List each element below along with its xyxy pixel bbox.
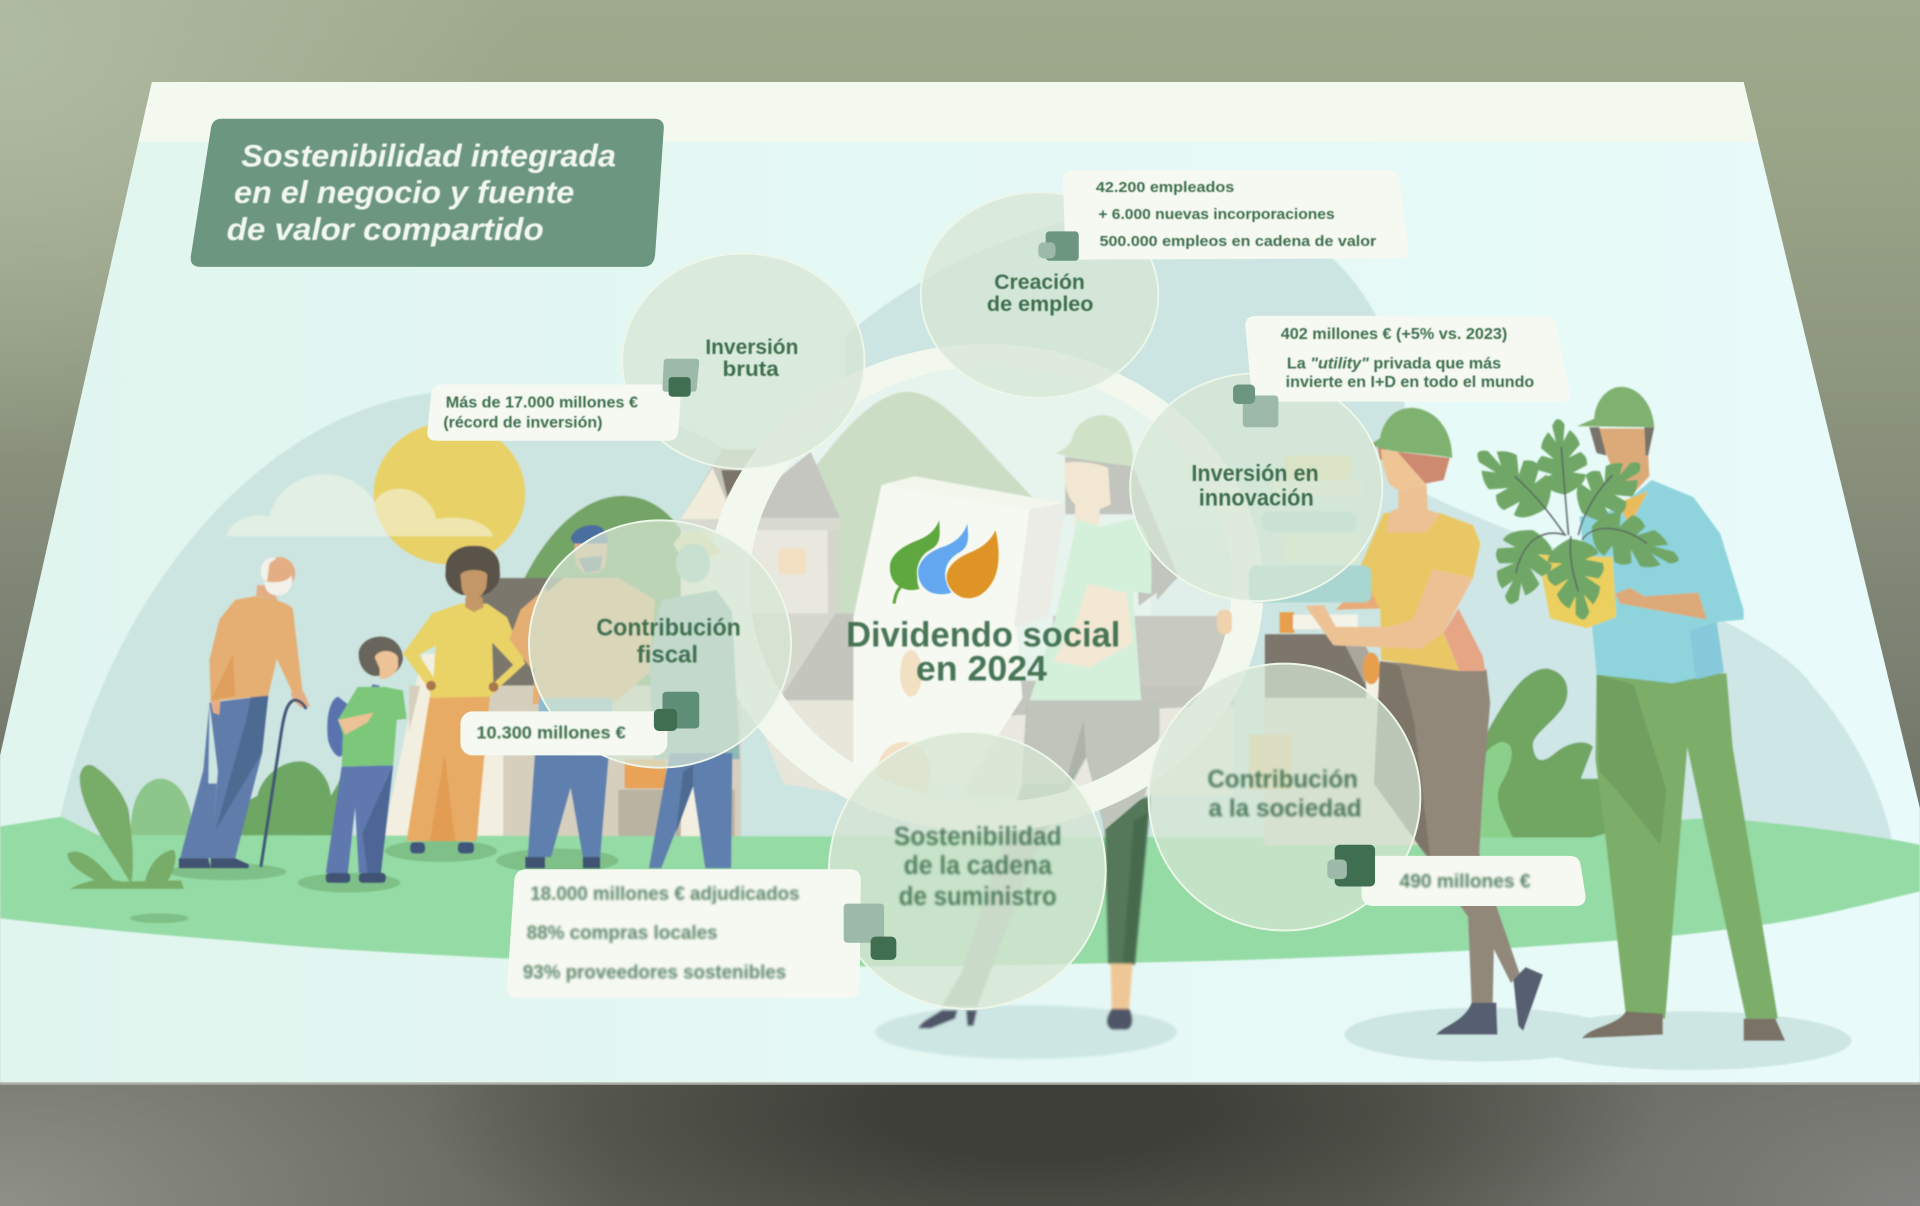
hill: right dome [1408,485,1895,857]
title text: de valor compartido [227,211,544,247]
right-side house details behind woman [1249,634,1426,845]
panel: Contribución a la sociedad [1149,664,1586,931]
text: cadena figures [523,884,800,983]
central ring area: inner mountain, houses and overlay [746,364,1235,806]
green hill [524,495,682,686]
text: empleo figures: 500.000 empleos en cadena de valor [1100,234,1377,250]
callout: empleo figures [1063,170,1408,260]
title text [227,138,616,247]
callout: sociedad figures [1362,856,1586,906]
person: man in blue shirt [1528,387,1851,1070]
heading: Inversión en innovación: innovación [1199,485,1314,511]
text: cadena figures: 93% proveedores sostenibles [523,962,786,983]
heading: Creación de empleo [987,271,1093,316]
heading: Inversión en innovación [1191,460,1319,511]
books inside bubble [1249,455,1371,602]
person: woman with yellow top [1217,408,1619,1062]
icon: squares [654,692,699,731]
white block with peach shapes [853,616,1022,806]
potted plant [1476,418,1680,629]
text: innovación figures: invierte en I+D en todo el mundo [1286,374,1535,391]
person: man with blue hair [509,525,655,868]
heading: Contribución fiscal: fiscal [637,641,698,668]
white ring [708,344,1264,831]
inner houses [753,514,1234,796]
heading: Inversión bruta: Inversión [705,335,798,359]
title text: en el negocio y fuente [234,174,574,210]
heading: Inversión bruta: bruta [722,357,780,381]
central heading: en 2024 [916,649,1047,689]
callout: cadena figures [507,869,861,998]
panel: Sostenibilidad de la cadena de suministro [507,732,1106,1009]
heading: Sostenibilidad [894,823,1062,911]
heading: Inversión bruta [705,335,798,381]
text: empleo figures: 42.200 empleados [1096,180,1234,196]
text: cadena figures: 18.000 millones € adjudicados [530,884,800,905]
title text: Sostenibilidad integrada [241,138,616,174]
bubble: Contribución fiscal [529,520,791,768]
heading: Contribución a la sociedad [1207,765,1362,823]
heading: Contribución a la sociedad: Contribución [1207,765,1358,793]
central heading: Dividendo social [846,614,1120,654]
callout: innovación figures [1245,316,1570,402]
heading: Sostenibilidad: Sostenibilidad [894,823,1062,851]
text: fiscal figures: 10.300 millones € [476,722,626,742]
person: elderly man [179,557,310,868]
heading: Creación de empleo: de empleo [987,293,1093,316]
heading: Contribución fiscal: Contribución [596,614,741,641]
foreground plant [67,765,184,889]
sun [374,422,525,564]
bubble: Sostenibilidad [829,732,1106,1009]
text: innovación figures: La "utility" privada que más [1287,356,1501,373]
panel: Contribución fiscal [460,520,791,768]
heading: Contribución a la sociedad: a la sociedad [1209,795,1362,823]
person: centre woman, pale inside ring [1022,415,1178,830]
illustration background scene [0,203,1920,966]
icon: squares [1233,384,1278,427]
ground patches [130,840,618,923]
text: inversion figures [443,395,638,431]
icon: squares [844,904,896,960]
text: innovación figures [1281,326,1535,391]
title panel [191,119,664,267]
person: second man [649,531,740,868]
callout: fiscal figures [460,711,667,755]
panel: Inversión bruta [427,253,864,469]
bubble: Contribución a la sociedad [1149,664,1420,931]
house left dark roof and walls [383,578,741,837]
text: inversion figures: (récord de inversión) [443,414,602,431]
box with logo backdrop [853,476,1065,627]
text: inversion figures: Más de 17.000 millones € [446,395,638,412]
title background [191,119,664,267]
hill: centre dome [845,203,1469,845]
back bushes left [131,761,345,837]
heading: Sostenibilidad: de la cadena [904,852,1053,880]
icon: squares [1038,231,1079,261]
central heading [846,614,1120,689]
bubble: Inversión bruta [622,253,864,469]
text: sociedad figures: 490 millones € [1400,872,1531,893]
heading: Inversión en innovación: Inversión en [1191,460,1319,486]
text: innovación figures: 402 millones € (+5% vs. 2023) [1281,326,1507,343]
text: empleo figures [1096,180,1377,250]
heading: Contribución fiscal [596,614,741,668]
text: empleo figures: + 6.000 nuevas incorporaciones [1098,207,1335,223]
heading: Sostenibilidad: de suministro [899,883,1057,911]
person: boy with backpack [326,637,407,883]
callout: inversion figures [427,384,681,441]
cloud [227,474,494,536]
house left tower [680,450,756,837]
logo [890,520,999,604]
inner mountain [814,392,1035,618]
inner ring fill [781,368,1152,681]
people and foreground illustration [179,387,1851,1070]
panel: Creación de empleo [921,170,1408,398]
icon: squares [662,359,699,397]
text: cadena figures: 88% compras locales [527,923,718,944]
bubble: Creación de empleo [921,192,1158,398]
ground [0,817,1920,966]
person: woman in yellow [403,546,525,853]
panel: Inversión en innovación [1130,316,1570,602]
right bushes [1479,668,1606,838]
icon: squares [1327,845,1375,886]
inner tower [749,452,840,616]
bubble: Inversión en innovación [1130,373,1382,601]
hill: left dome [55,390,857,845]
person: centre woman lower leg [876,706,1177,1059]
heading: Creación de empleo: Creación [994,271,1085,294]
